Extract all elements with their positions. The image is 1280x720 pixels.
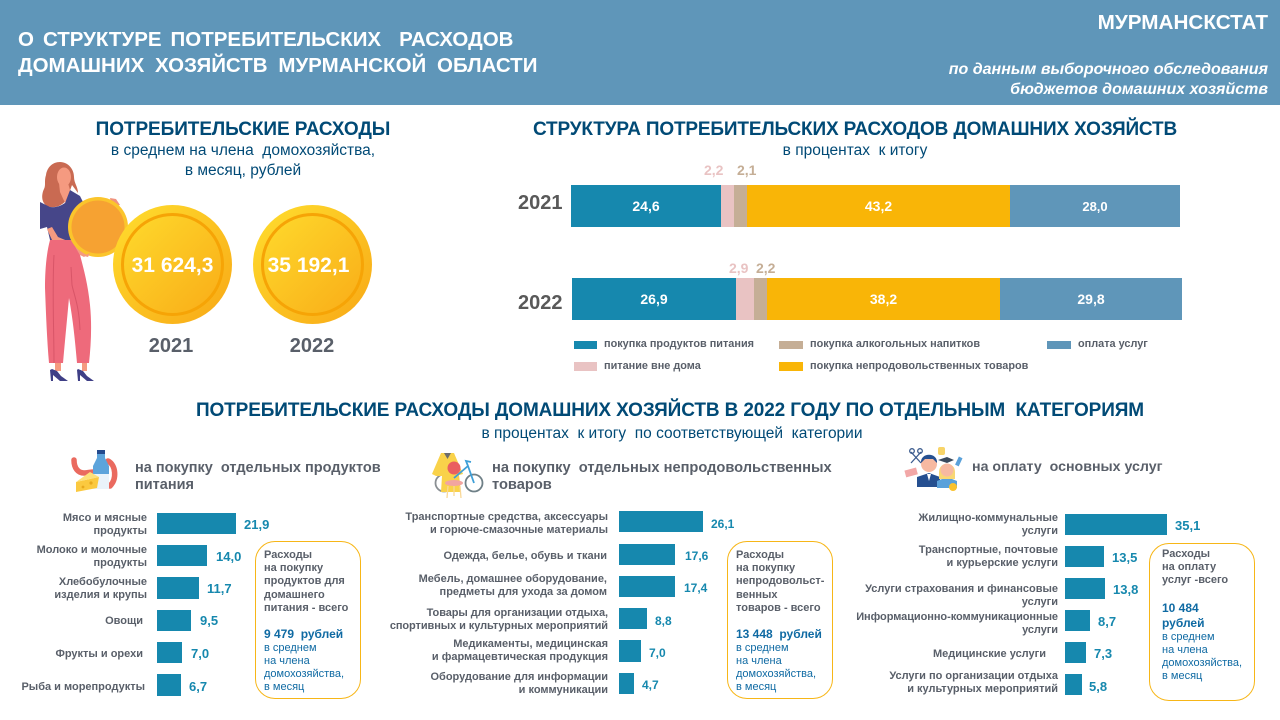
main title: О СТРУКТУРЕ ПОТРЕБИТЕЛЬСКИХ РАСХОДОВ ДОМАШНИХ ХОЗЯЙСТВ МУРМАНСКОЙ ОБЛАСТИ [18, 28, 537, 76]
services values [1089, 518, 1200, 694]
non-food values: 17,6 [685, 549, 708, 563]
services total callout: на члена [1162, 644, 1208, 656]
services total callout: на оплату [1162, 561, 1216, 573]
category labels: Медицинские услуги [933, 648, 1046, 660]
non-food total callout: на члена [736, 655, 782, 667]
category labels: Транспортные, почтовые [919, 544, 1058, 556]
non-food total callout: Расходы [736, 549, 784, 561]
coin value 2021: 31 624,3 [132, 254, 213, 277]
year label 2022: 2022 [290, 335, 334, 357]
category labels: Рыба и морепродукты [21, 681, 145, 693]
year 2021: 2021 [518, 192, 562, 214]
category labels: Молоко и молочные [37, 544, 147, 556]
food total callout: домашнего [264, 589, 325, 601]
legend [574, 338, 1148, 372]
food total callout: продуктов для [264, 575, 345, 587]
coin: 2022 [253, 205, 372, 324]
non-food values [642, 517, 734, 692]
services total callout: 10 484 [1162, 601, 1199, 615]
food values: 7,0 [191, 646, 209, 661]
non-food values: 4,7 [642, 678, 659, 692]
year 2022: 2022 [518, 292, 562, 314]
panel: non-food [390, 453, 833, 699]
food total callout [255, 541, 361, 699]
category labels [21, 512, 147, 693]
legend: питание вне дома [604, 360, 701, 372]
category labels: Жилищно-коммунальные [918, 512, 1058, 524]
labels 2022 small shares: 2,2 [756, 260, 775, 276]
food total callout: Расходы [264, 549, 312, 561]
subheading: categories: в процентах к итогу по соответствующей категории [481, 425, 862, 442]
services values: 35,1 [1175, 518, 1200, 533]
icon: woman holding coin [40, 162, 128, 381]
labels 2021 small shares: 2,2 [704, 162, 723, 178]
services total callout: в среднем [1162, 631, 1215, 643]
services values: 13,8 [1113, 582, 1138, 597]
panel: food [21, 450, 381, 699]
services total callout: рублей [1162, 616, 1204, 630]
food total callout: на члена [264, 655, 310, 667]
category labels: продукты [94, 525, 147, 537]
category labels: спортивных и культурных мероприятий [390, 620, 608, 632]
non-food total callout: домохозяйства, [736, 668, 816, 680]
category labels: Услуги страхования и финансовые [865, 583, 1058, 595]
icon: food [71, 450, 118, 492]
non-food values: 17,4 [684, 581, 707, 595]
labels 2021 small shares: 2,1 [737, 162, 756, 178]
non-food section heading: на покупку отдельных непродовольственных товаров [492, 460, 832, 493]
legend: покупка продуктов питания [604, 338, 754, 350]
category labels: Мебель, домашнее оборудование, [419, 573, 607, 585]
food values: 11,7 [207, 581, 232, 596]
legend: покупка непродовольственных товаров [810, 360, 1028, 372]
subheading: structure: в процентах к итогу [783, 142, 927, 159]
coin: 2021 [113, 205, 232, 324]
category labels: Фрукты и орехи [55, 648, 143, 660]
header band [0, 0, 1280, 105]
coin value 2022: 35 192,1 [268, 254, 349, 277]
services total callout: домохозяйства, [1162, 657, 1242, 669]
food section heading: на покупку отдельных продуктов питания [135, 460, 381, 493]
category labels: услуги [1022, 596, 1058, 608]
food total callout: 9 479 рублей [264, 627, 343, 641]
labels 2021 small shares [704, 162, 756, 178]
category labels: и горюче-смазочные материалы [430, 524, 608, 536]
food bars [157, 513, 236, 696]
non-food total callout: в месяц [736, 681, 776, 693]
year label 2021: 2021 [149, 335, 193, 357]
services values: 8,7 [1098, 614, 1116, 629]
category labels: и курьерские услуги [947, 557, 1058, 569]
non-food total callout: товаров - всего [736, 602, 821, 614]
category labels: Мясо и мясные [63, 512, 147, 524]
category labels [856, 512, 1058, 695]
icon: services [904, 447, 962, 491]
category labels: услуги [1022, 525, 1058, 537]
services section heading: на оплату основных услуг [972, 459, 1163, 475]
non-food total callout: в среднем [736, 642, 789, 654]
category labels: Медикаменты, медицинская [453, 638, 608, 650]
bar 2021: 28,0 [1082, 199, 1108, 214]
labels 2022 small shares [729, 260, 775, 276]
category labels: Услуги по организации отдыха [889, 670, 1058, 682]
bar 2022: 38,2 [870, 291, 897, 307]
food values [189, 517, 269, 694]
food values: 6,7 [189, 679, 207, 694]
bar 2022: 26,9 [640, 291, 668, 307]
category labels: Овощи [105, 615, 143, 627]
non-food values: 26,1 [711, 517, 734, 531]
food total callout: на покупку [264, 562, 323, 574]
labels 2022 small shares: 2,9 [729, 260, 748, 276]
non-food values: 8,8 [655, 614, 672, 628]
category labels: изделия и крупы [54, 589, 147, 601]
services total callout: в месяц [1162, 670, 1202, 682]
services total callout: Расходы [1162, 548, 1210, 560]
services values: 7,3 [1094, 646, 1112, 661]
subheading: consumer spending: в среднем на члена домохозяйства, в месяц, рублей [111, 142, 375, 179]
services values: 13,5 [1112, 550, 1137, 565]
bar 2022 [572, 278, 1182, 320]
category labels: услуги [1022, 624, 1058, 636]
services values: 5,8 [1089, 679, 1107, 694]
legend: покупка алкогольных напитков [810, 338, 980, 350]
services total callout [1149, 543, 1255, 701]
category labels [390, 511, 608, 696]
non-food values: 7,0 [649, 646, 666, 660]
category labels: Информационно-коммуникационные [856, 611, 1058, 623]
category labels: и фармацевтическая продукция [432, 651, 608, 663]
heading: consumer spending: ПОТРЕБИТЕЛЬСКИЕ РАСХОДЫ [96, 119, 390, 140]
heading: structure: СТРУКТУРА ПОТРЕБИТЕЛЬСКИХ РАСХОДОВ ДОМАШНИХ ХОЗЯЙСТВ [533, 119, 1177, 140]
non-food total callout: 13 448 рублей [736, 627, 822, 641]
bar 2021: 24,6 [632, 198, 660, 214]
icon: non-food goods [432, 453, 484, 498]
category labels: Оборудование для информации [430, 671, 608, 683]
food values: 21,9 [244, 517, 269, 532]
category labels: Транспортные средства, аксессуары [405, 511, 608, 523]
legend: оплата услуг [1078, 338, 1148, 350]
panel: services [856, 447, 1255, 701]
category labels: предметы для ухода за домом [440, 586, 607, 598]
category labels: Хлебобулочные [59, 576, 147, 588]
food total callout: в месяц [264, 681, 304, 693]
category labels: Товары для организации отдыха, [427, 607, 608, 619]
services bars [1065, 514, 1167, 695]
non-food total callout: венных [736, 589, 778, 601]
food total callout: в среднем [264, 642, 317, 654]
non-food total callout: непродовольст- [736, 575, 824, 587]
food total callout: домохозяйства, [264, 668, 344, 680]
category labels: продукты [94, 557, 147, 569]
category labels: Одежда, белье, обувь и ткани [444, 550, 607, 562]
services total callout: услуг -всего [1162, 574, 1228, 586]
stacked bar chart [518, 162, 1182, 320]
organisation name: МУРМАНСКСТАТ [1098, 11, 1268, 34]
category labels: и культурных мероприятий [907, 683, 1058, 695]
non-food total callout [727, 541, 833, 699]
bar 2022: 29,8 [1077, 291, 1105, 307]
food values: 9,5 [200, 613, 218, 628]
bar 2021 [571, 185, 1180, 227]
data source note: по данным выборочного обследования бюджетов домашних хозяйств [949, 61, 1268, 98]
food total callout: питания - всего [264, 602, 348, 614]
non-food bars [619, 511, 703, 694]
heading: categories: ПОТРЕБИТЕЛЬСКИЕ РАСХОДЫ ДОМАШНИХ ХОЗЯЙСТВ В 2022 ГОДУ ПО ОТДЕЛЬНЫМ КАТЕГОРИЯМ [196, 400, 1144, 421]
food values: 14,0 [216, 549, 241, 564]
bar 2021: 43,2 [865, 198, 892, 214]
non-food total callout: на покупку [736, 562, 795, 574]
category labels: и коммуникации [519, 684, 608, 696]
